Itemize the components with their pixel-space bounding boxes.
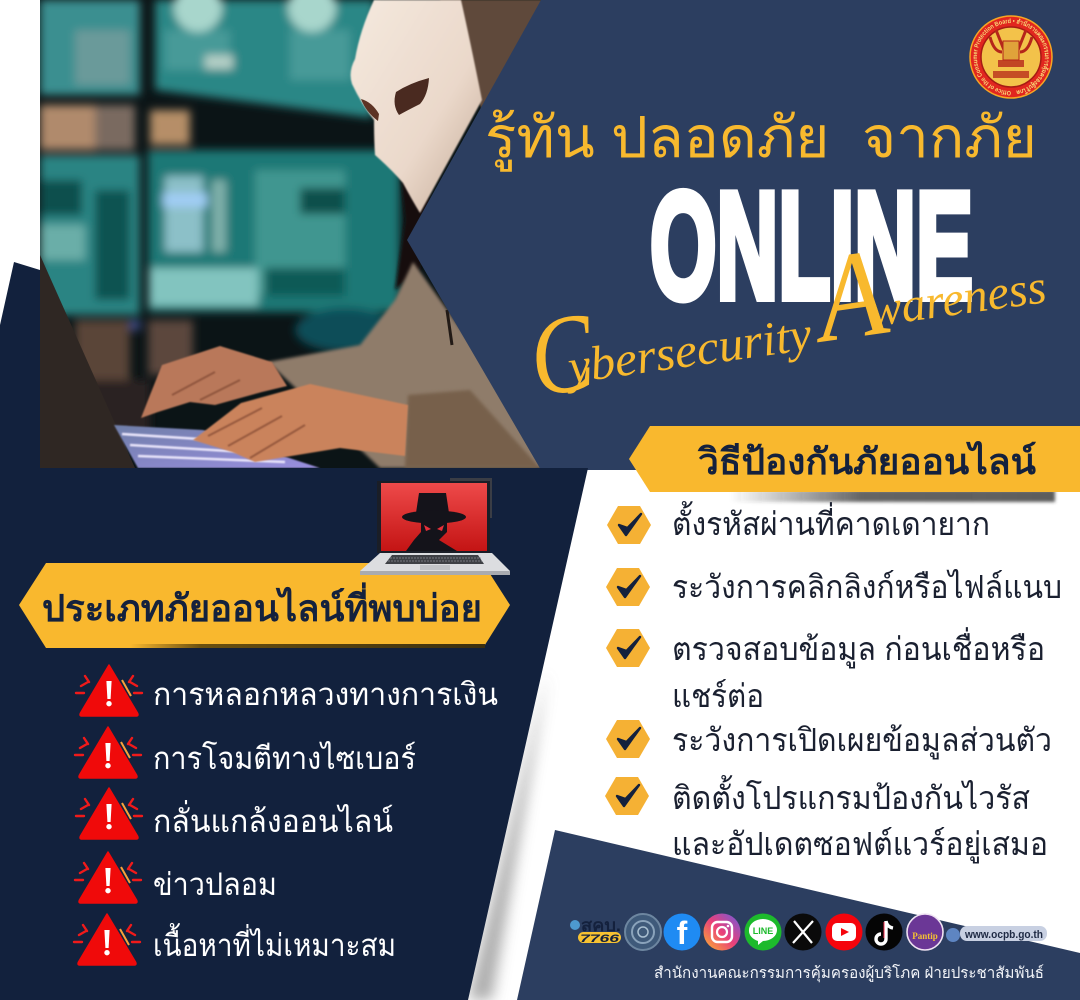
banner: prevention heading xyxy=(629,426,1080,502)
tip 5: และอัปเดตซอฟต์แวร์อยู่เสมอ xyxy=(672,826,1048,864)
threat 3 xyxy=(76,788,393,839)
threat 1: การหลอกหลวงทางการเงิน xyxy=(153,677,498,712)
tip 3: ตรวจสอบข้อมูล ก่อนเชื่อหรือ xyxy=(672,627,1045,669)
panel: footer navy background xyxy=(517,830,1080,1000)
hood xyxy=(440,0,541,108)
threat 4: ข่าวปลอม xyxy=(153,867,277,902)
tip 1 xyxy=(607,501,990,544)
icon: hotline 1166 xyxy=(570,916,621,945)
icon: hacker on laptop xyxy=(360,478,510,575)
tip 1: ตั้งรหัสผ่านที่คาดเดายาก xyxy=(672,501,990,542)
tip 5: ติดตั้งโปรแกรมป้องกันไวรัส xyxy=(672,775,1030,816)
panel: online threats dark background xyxy=(0,262,588,1000)
social icons row xyxy=(570,914,1047,951)
subtitle: Cybersecurity Awareness xyxy=(519,201,1054,421)
icon: line xyxy=(744,914,782,950)
banner: threat types heading: ประเภทภัยออนไลน์ที่พบบ่อย xyxy=(42,582,482,629)
right hand xyxy=(193,384,408,462)
list: prevention tips xyxy=(605,501,1062,864)
tip 5 xyxy=(605,775,1048,864)
website pill xyxy=(946,926,1047,942)
hero photo: masked hacker typing at a laptop xyxy=(40,0,560,468)
icon: facebook xyxy=(664,914,700,951)
tip 4: ระวังการเปิดเผยข้อมูลส่วนตัว xyxy=(672,722,1052,760)
icon: hotline 1166: สคบ. xyxy=(581,916,621,935)
tip 3 xyxy=(606,627,1045,714)
banner: prevention heading: วิธีป้องกันภัยออนไลน์ xyxy=(697,440,1036,482)
website pill: www.ocpb.go.th xyxy=(964,929,1043,941)
threat 5 xyxy=(74,914,396,965)
hoodie body xyxy=(268,262,560,468)
list: threat types xyxy=(74,665,498,965)
mask xyxy=(351,0,482,213)
footer credit: สำนักงานคณะกรรมการคุ้มครองผู้บริโภค ฝ่ายประชาสัมพันธ์ xyxy=(654,964,1044,983)
dark neck shadow xyxy=(393,180,430,290)
threat 2 xyxy=(75,727,416,778)
threat 2: การโจมตีทางไซเบอร์ xyxy=(153,741,416,776)
tip 2: ระวังการคลิกลิงก์หรือไฟล์แนบ xyxy=(672,569,1062,605)
subtitle: Cybersecurity Awareness: ybersecurity xyxy=(560,307,815,395)
keyboard xyxy=(114,425,320,468)
threat 5: เนื้อหาที่ไม่เหมาะสม xyxy=(153,923,396,963)
icon: youtube xyxy=(826,914,862,950)
subtitle: Cybersecurity Awareness: C xyxy=(522,289,602,421)
icon: agency circle xyxy=(625,914,661,950)
hat, face and shoulders xyxy=(402,493,466,551)
title: Thai headline: รู้ทัน ปลอดภัย จากภัย xyxy=(485,106,1037,172)
icon: pantip xyxy=(907,914,943,950)
threat 1 xyxy=(76,665,498,716)
icon: hotline 1166: 7766 xyxy=(580,933,620,945)
laptop screen xyxy=(40,255,135,468)
logo: office seal: Office of the Consumer Protection Board • สำนักงานคณะกรรมการคุ้มครองผู้บริโภค xyxy=(974,18,1049,96)
icon: tiktok xyxy=(866,914,902,950)
left hand xyxy=(141,346,287,418)
icon: facebook: f xyxy=(677,915,688,951)
threat 3: กลั่นแกล้งออนไลน์ xyxy=(153,800,393,839)
subtitle: Cybersecurity Awareness: wareness xyxy=(866,260,1049,338)
panel shadow xyxy=(468,670,548,1000)
icon: instagram xyxy=(704,914,740,950)
tip 3: แชร์ต่อ xyxy=(672,678,764,714)
icon: pantip: Pantip xyxy=(912,931,938,941)
panel: title navy background xyxy=(407,0,1080,470)
icon: line: LINE xyxy=(753,926,773,936)
icon: x xyxy=(784,914,822,950)
banner: threat types heading xyxy=(19,563,510,648)
threat 4 xyxy=(75,852,277,903)
subtitle: Cybersecurity Awareness: A xyxy=(802,223,895,370)
